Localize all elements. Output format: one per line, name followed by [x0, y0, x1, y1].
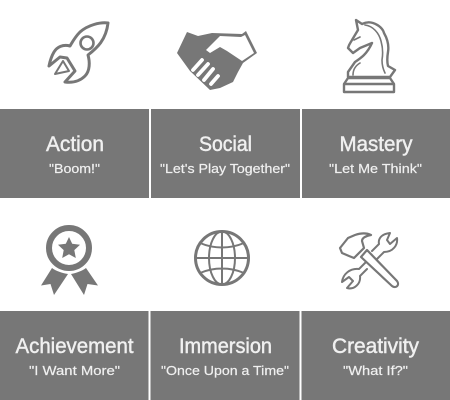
icon: globe [196, 231, 248, 285]
icon: handshake [177, 31, 257, 90]
panel: mastery [302, 109, 450, 198]
heading: immersion: Immersion [179, 335, 272, 358]
tagline: achievement: "I Want More" [29, 363, 120, 378]
tagline: action: "Boom!" [49, 161, 100, 176]
tagline: social: "Let's Play Together" [160, 161, 290, 176]
heading: creativity: Creativity [332, 335, 419, 358]
icon: hammer and wrench [340, 233, 398, 288]
panel: achievement [0, 311, 148, 400]
tagline: immersion: "Once Upon a Time" [161, 363, 289, 378]
panel: social [151, 109, 300, 198]
panel: action [0, 109, 149, 198]
panel: immersion [150, 311, 300, 400]
icon: rocket [49, 23, 108, 82]
heading: achievement: Achievement [16, 335, 134, 358]
heading: mastery: Mastery [340, 133, 413, 156]
icon: medal [41, 228, 98, 295]
tagline: creativity: "What If?" [343, 363, 408, 378]
heading: social: Social [199, 133, 252, 156]
panel: creativity [302, 311, 450, 400]
tagline: mastery: "Let Me Think" [329, 161, 422, 176]
icon: chess knight [344, 20, 395, 92]
heading: action: Action [46, 133, 104, 156]
